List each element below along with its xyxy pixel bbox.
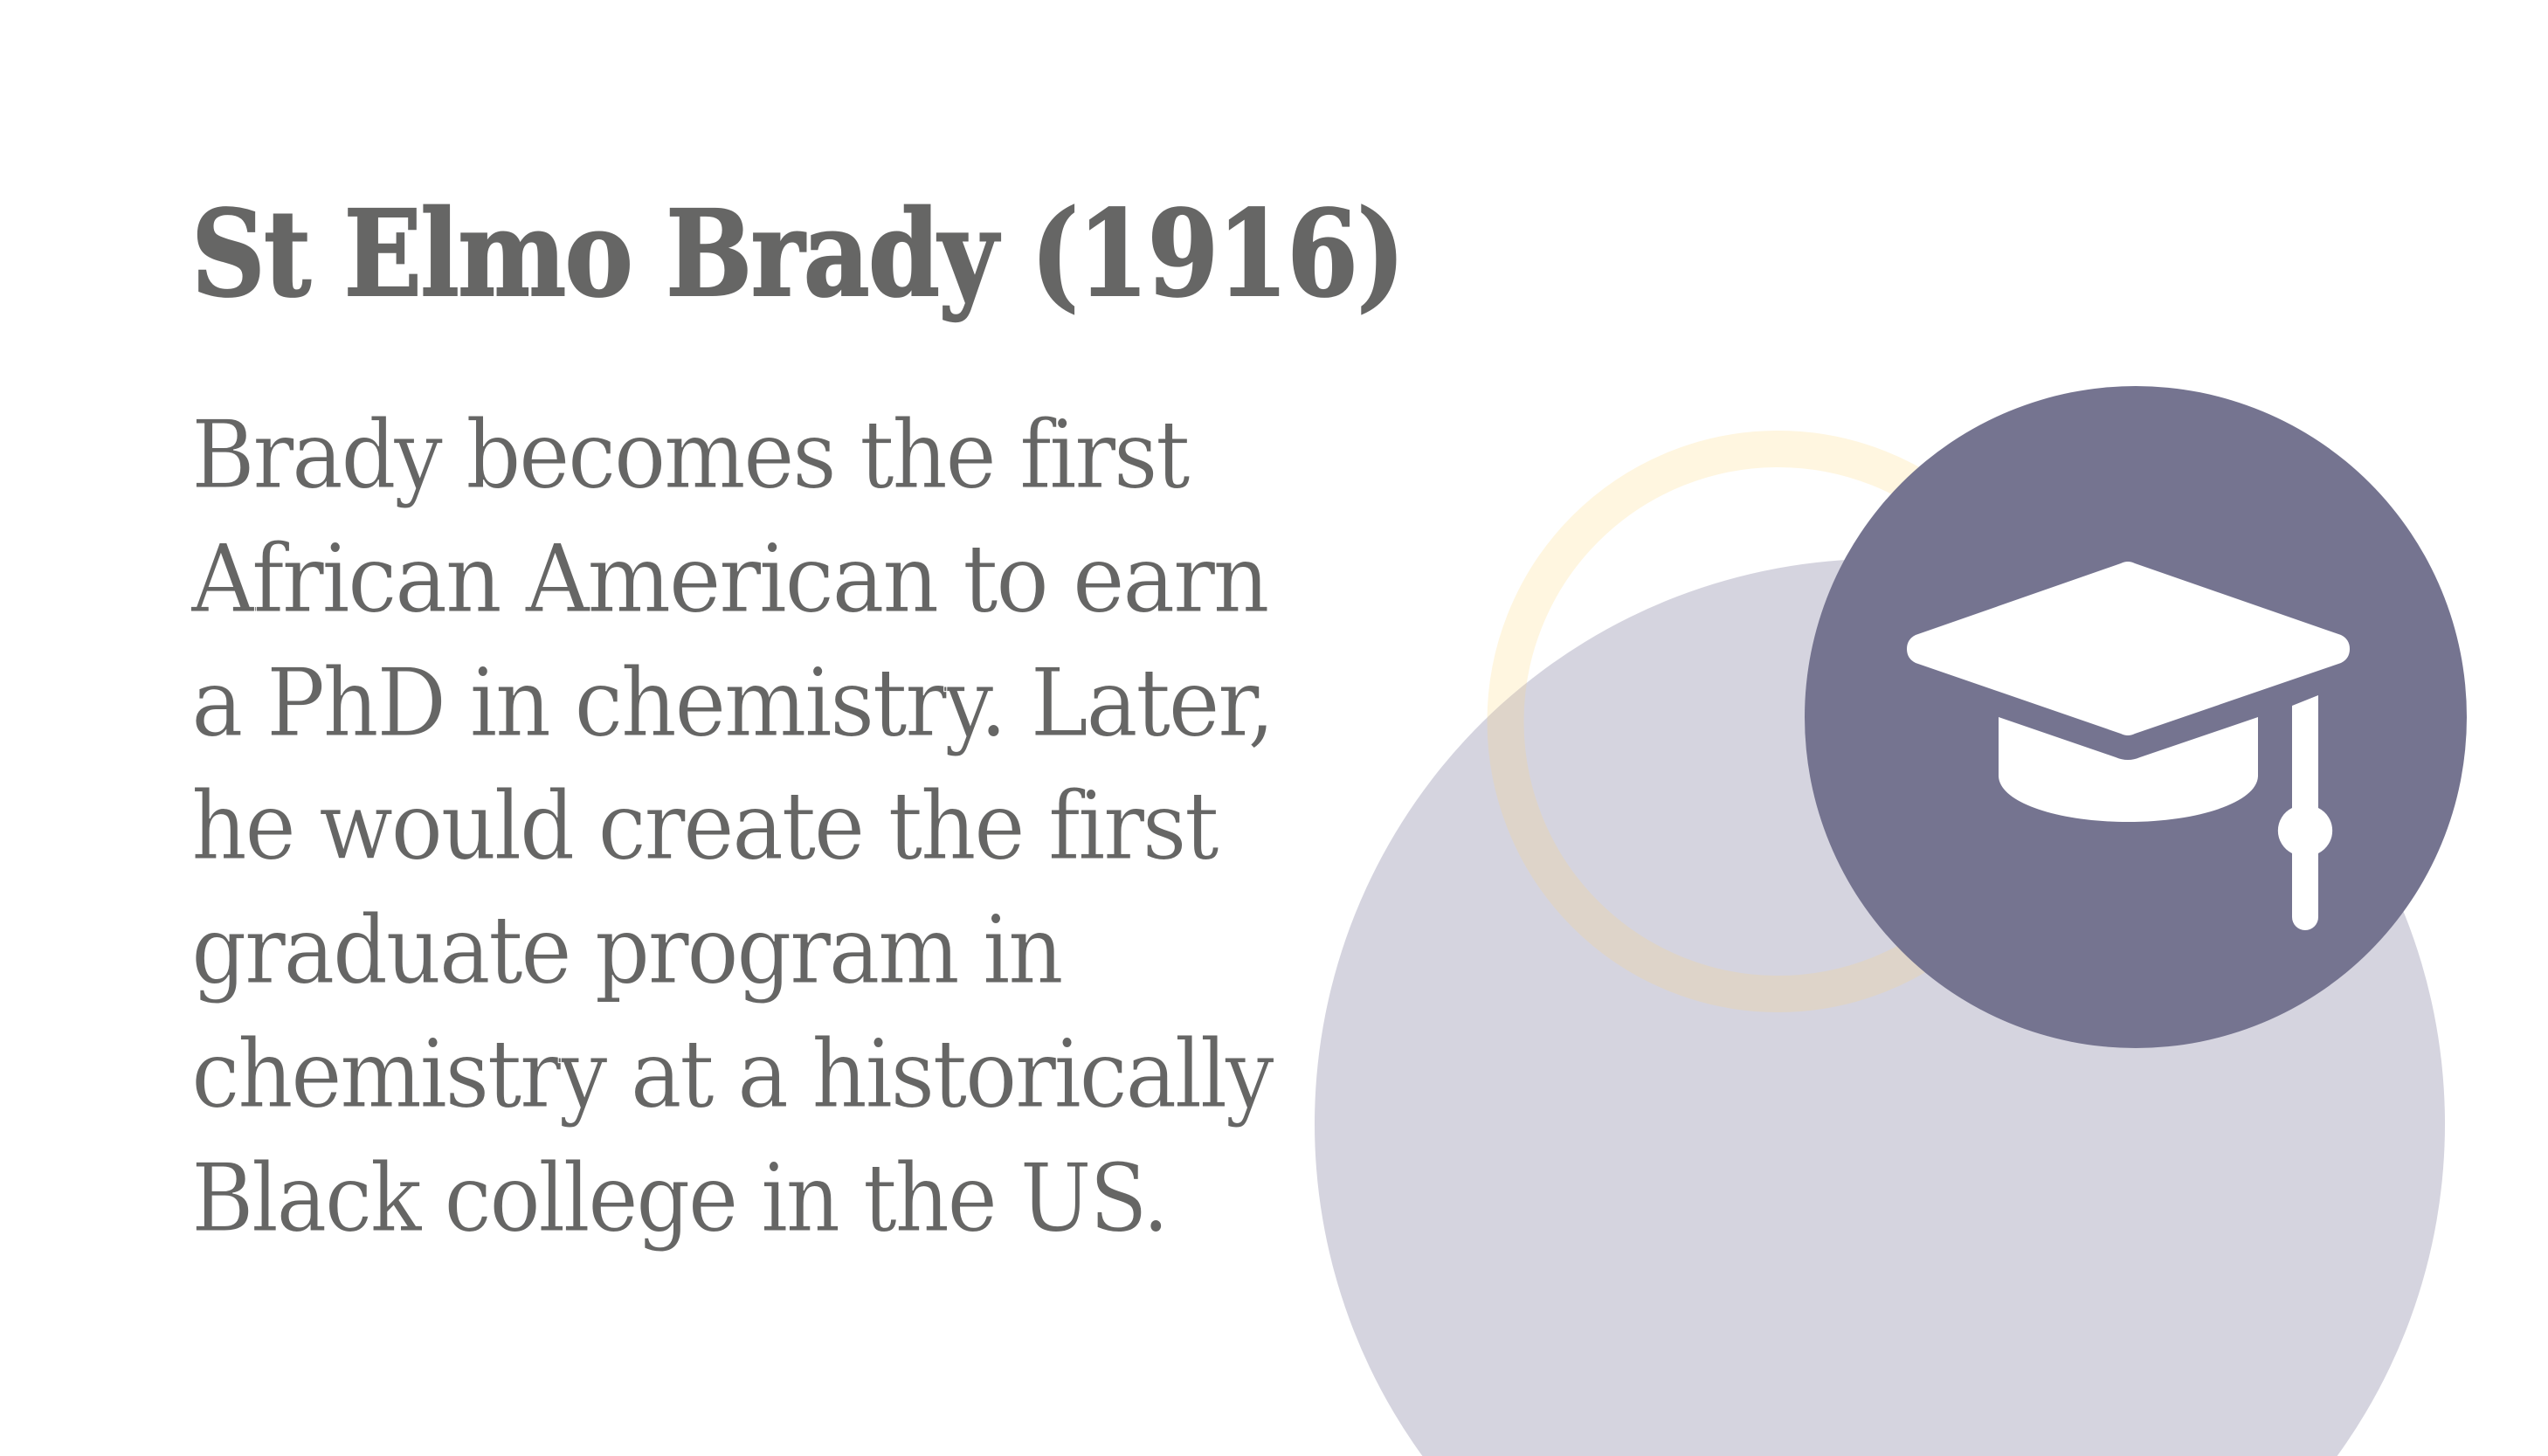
cap base: [1999, 717, 2258, 822]
tassel: [2278, 695, 2332, 930]
body text block: Brady becomes the first: [191, 401, 1190, 510]
mortarboard: [1907, 562, 2350, 735]
title: St Elmo Brady (1916): [191, 184, 1404, 324]
body text block: African American to earn: [190, 525, 1267, 634]
dark circle badge: [1805, 386, 2467, 1048]
body text block: he would create the first: [191, 772, 1219, 881]
icon: graduation cap in dark circle: [1805, 386, 2467, 1048]
body text block: [190, 401, 1274, 1253]
body text block: graduate program in: [191, 896, 1061, 1005]
body text block: chemistry at a historically: [191, 1020, 1274, 1129]
body text block: Black college in the US.: [191, 1144, 1167, 1253]
large lavender circle: [1315, 559, 2445, 1456]
body text block: a PhD in chemistry. Later,: [191, 649, 1273, 758]
ring overlap with lavender circle: [1487, 683, 1925, 1012]
decorative ring: pale yellow: [1506, 449, 2051, 994]
